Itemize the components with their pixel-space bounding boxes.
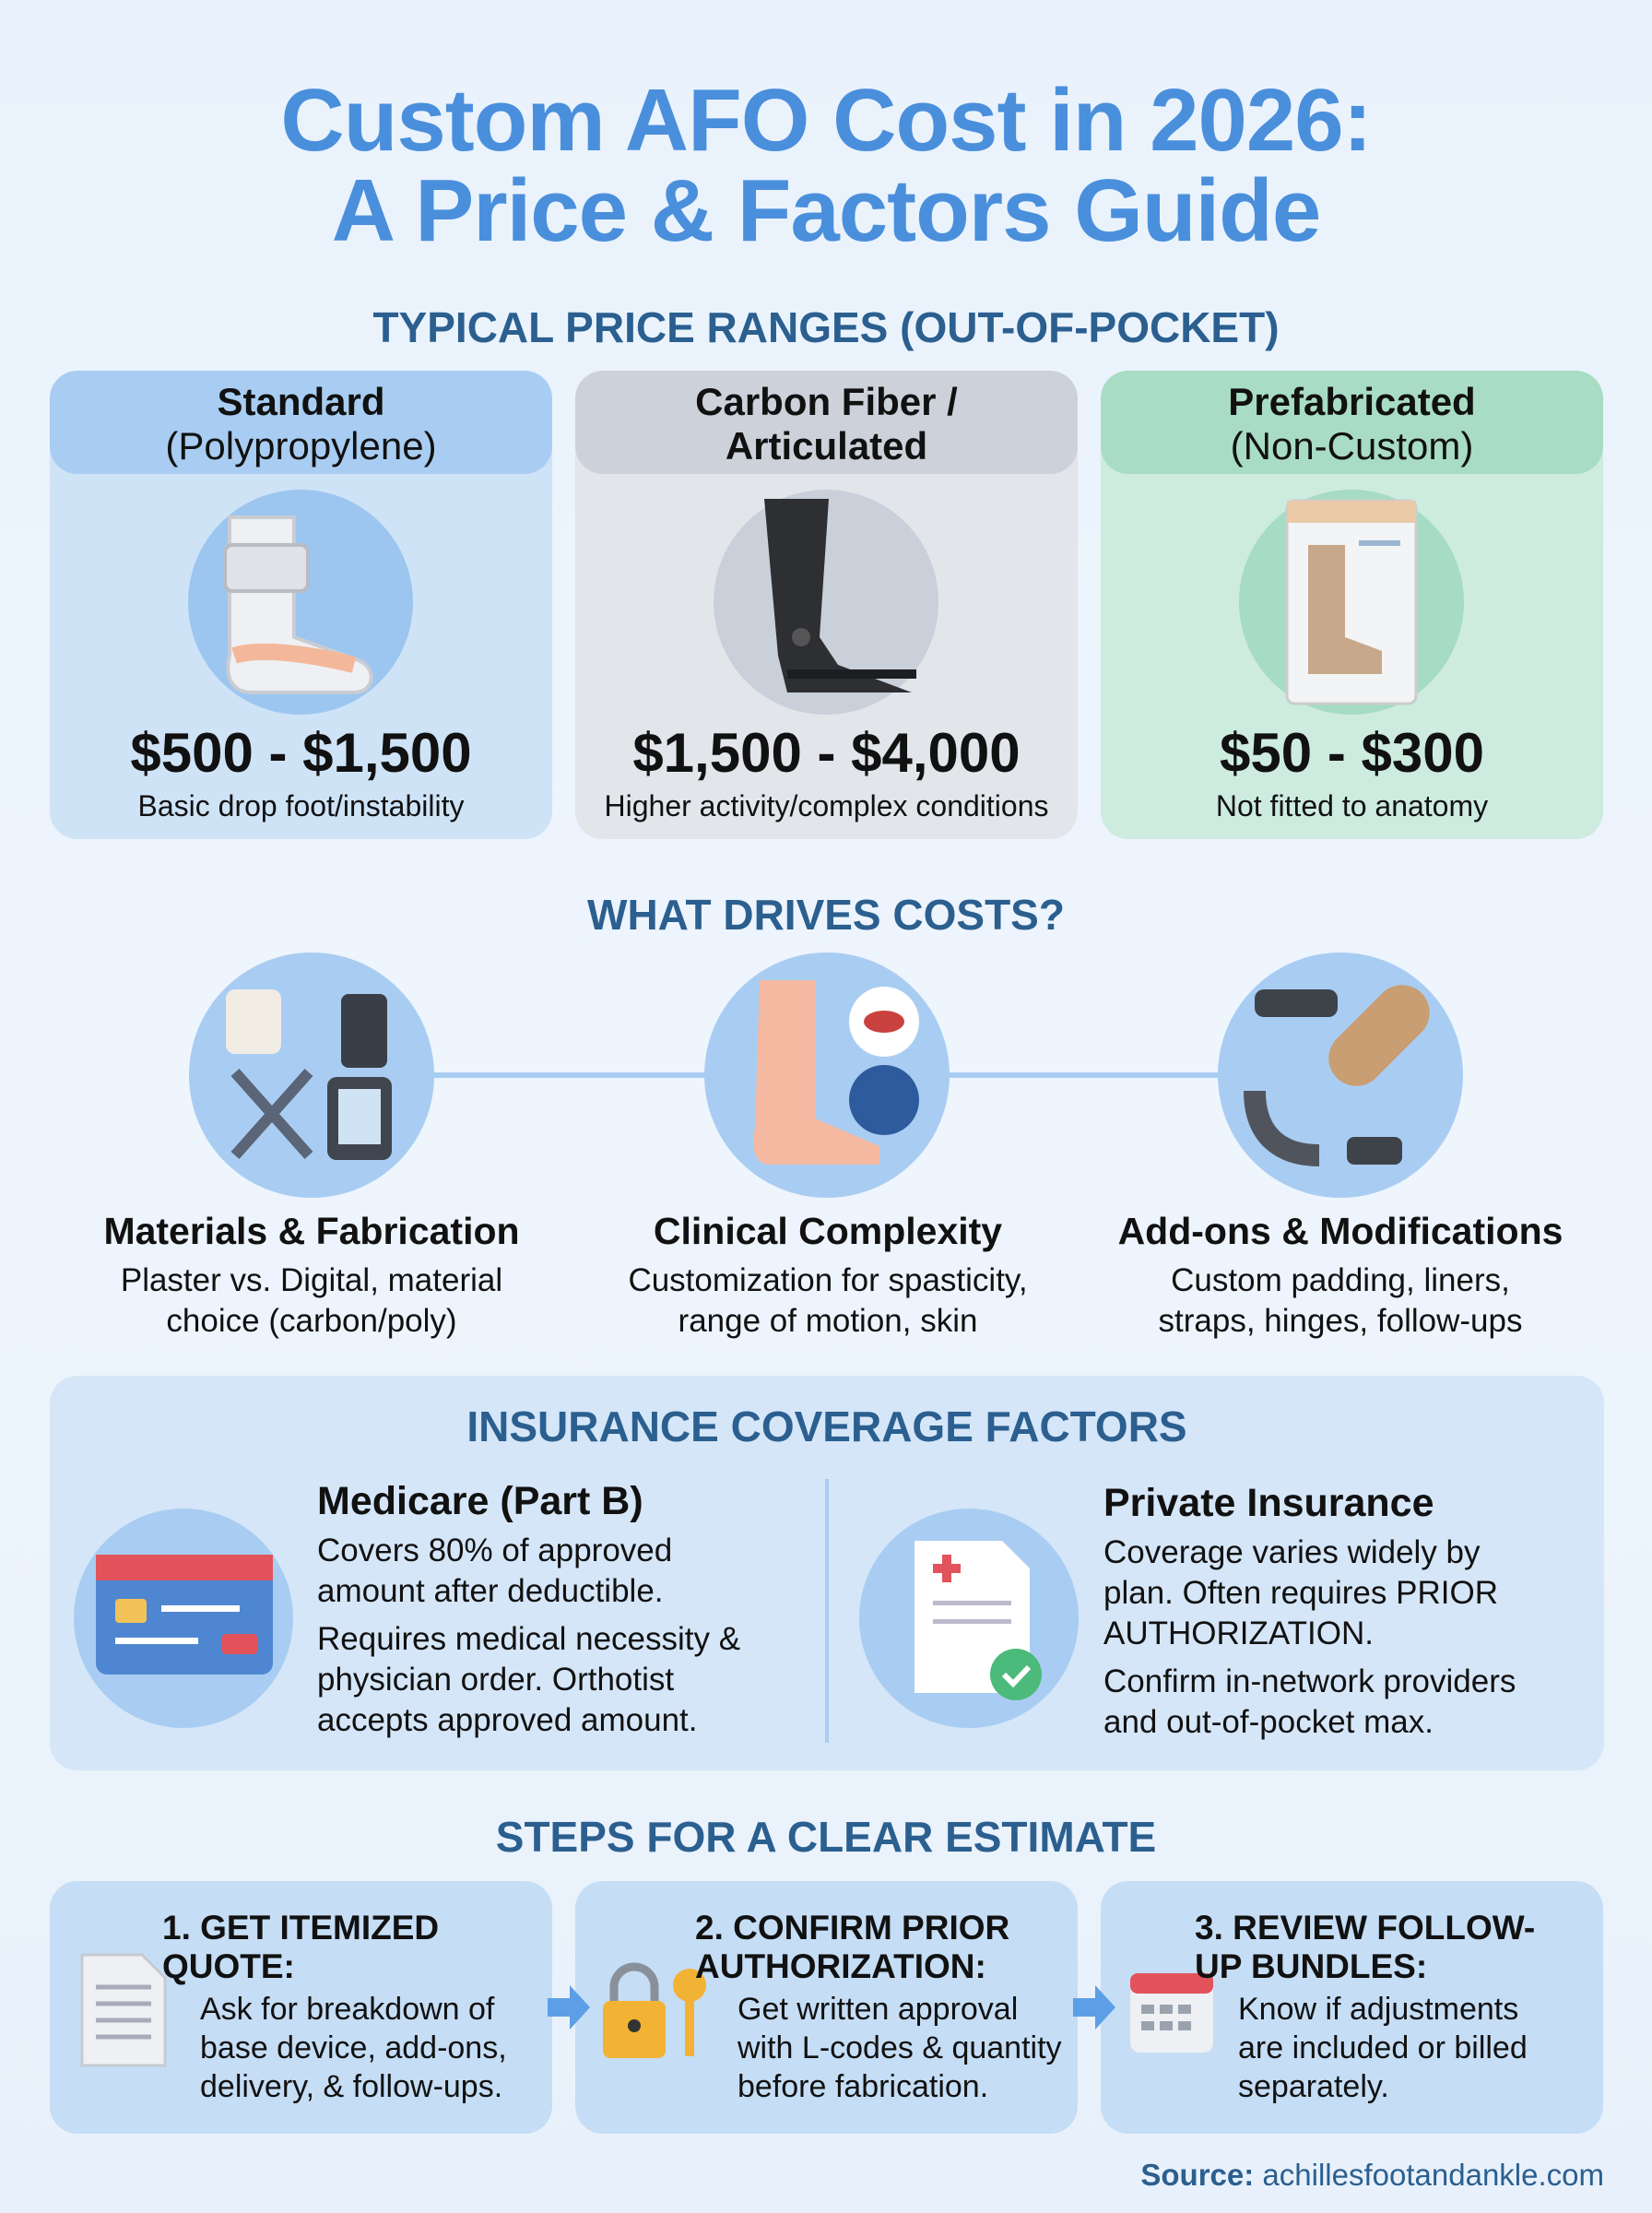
text: private insurance: Confirm in-network providers [1103, 1663, 1516, 1699]
icon: document [81, 1953, 166, 2067]
desc: clinical: Customization for spasticity, [628, 1262, 1028, 1298]
icon: document check [859, 1509, 1079, 1728]
text: medicare: accepts approved amount. [317, 1702, 697, 1738]
text: medicare [317, 1479, 740, 1738]
card header: (Non-Custom) [1231, 424, 1473, 467]
icon: calendar [1130, 1973, 1213, 2053]
step 1 [50, 1881, 552, 2134]
icon: carbon AFO [714, 490, 938, 715]
desc: clinical [628, 1262, 1028, 1339]
desc: materials: choice (carbon/poly) [166, 1303, 457, 1339]
step 1: delivery, & follow-ups. [200, 2069, 502, 2104]
desc: add-ons: straps, hinges, follow-ups [1159, 1303, 1522, 1339]
text: private insurance: and out-of-pocket max. [1103, 1704, 1434, 1740]
description: Basic drop foot/instability [138, 789, 464, 822]
text: private insurance: AUTHORIZATION. [1103, 1615, 1374, 1651]
heading: cost drivers: WHAT DRIVES COSTS? [587, 891, 1065, 939]
icon: lock and key [603, 1962, 706, 2058]
card header: Prefabricated [1228, 380, 1476, 423]
icon: add-ons [1218, 953, 1463, 1198]
title: A Price & Factors Guide [332, 161, 1320, 260]
step 3: Know if adjustments [1238, 1992, 1518, 2027]
card header [1101, 371, 1603, 474]
step 2: before fabrication. [738, 2069, 988, 2104]
description: Higher activity/complex conditions [605, 789, 1048, 822]
text: private insurance: Coverage varies widely by [1103, 1534, 1481, 1570]
title: Custom AFO Cost in 2026: [280, 71, 1372, 170]
desc: materials [121, 1262, 502, 1339]
icon: ankle brace [188, 490, 413, 715]
text: medicare: amount after deductible. [317, 1573, 664, 1609]
card header [50, 371, 552, 474]
icon: insurance card [74, 1509, 293, 1728]
price: $500 - $1,500 [130, 722, 472, 784]
panel: insurance [50, 1376, 1604, 1770]
step 3: separately. [1238, 2069, 1389, 2104]
step 1: Ask for breakdown of [200, 1992, 494, 2027]
desc: clinical: range of motion, skin [678, 1303, 977, 1339]
step 1: 1. GET ITEMIZED [162, 1909, 439, 1947]
card header: Standard [217, 380, 385, 423]
desc: materials: Plaster vs. Digital, material [121, 1262, 502, 1298]
description: Not fitted to anatomy [1216, 789, 1488, 822]
text: medicare: Covers 80% of approved [317, 1533, 672, 1568]
heading: insurance: INSURANCE COVERAGE FACTORS [466, 1402, 1187, 1450]
price: $1,500 - $4,000 [632, 722, 1021, 784]
text: private insurance: Private Insurance [1103, 1481, 1434, 1525]
card header: (Polypropylene) [165, 424, 437, 467]
desc: add-ons [1159, 1262, 1522, 1339]
card header [575, 371, 1078, 474]
step 3: are included or billed [1238, 2030, 1528, 2065]
panel: carbon fiber [575, 371, 1078, 839]
step 1: base device, add-ons, [200, 2030, 507, 2065]
step 2: Get written approval [738, 1992, 1018, 2027]
text: medicare: Medicare (Part B) [317, 1479, 643, 1523]
text: materials: Materials & Fabrication [103, 1210, 520, 1252]
source: Source: achillesfootandankle.com [1140, 2158, 1604, 2192]
panel: prefabricated [1101, 371, 1603, 839]
title [280, 71, 1372, 260]
arrow 1 [548, 1985, 590, 2030]
text: clinical: Clinical Complexity [654, 1210, 1002, 1252]
card header: Articulated [726, 424, 927, 467]
text: private insurance: plan. Often requires PRIOR [1103, 1575, 1498, 1611]
price: $50 - $300 [1220, 722, 1484, 784]
icon: clinical [704, 953, 950, 1198]
step 2: with L-codes & quantity [738, 2030, 1062, 2065]
text: add-ons: Add-ons & Modifications [1118, 1210, 1563, 1252]
arrow 2 [1073, 1985, 1115, 2030]
card header: Carbon Fiber / [695, 380, 958, 423]
icon: boxed brace [1239, 490, 1464, 715]
heading: price ranges: TYPICAL PRICE RANGES (OUT-OF-POCKET) [372, 303, 1280, 351]
step 3: 3. REVIEW FOLLOW- [1195, 1909, 1535, 1947]
step 3 [1101, 1881, 1603, 2134]
step 3: UP BUNDLES: [1195, 1947, 1427, 1985]
panel: standard [50, 371, 552, 839]
step 1: QUOTE: [162, 1947, 295, 1985]
step 2: 2. CONFIRM PRIOR [695, 1909, 1009, 1947]
text: medicare: physician order. Orthotist [317, 1662, 674, 1698]
step 2 [575, 1881, 1078, 2134]
icon: materials [189, 953, 434, 1198]
desc: add-ons: Custom padding, liners, [1171, 1262, 1510, 1298]
text: medicare: Requires medical necessity & [317, 1621, 740, 1657]
step 2: AUTHORIZATION: [695, 1947, 986, 1985]
text: private insurance [1103, 1481, 1516, 1740]
heading: steps: STEPS FOR A CLEAR ESTIMATE [496, 1813, 1156, 1861]
